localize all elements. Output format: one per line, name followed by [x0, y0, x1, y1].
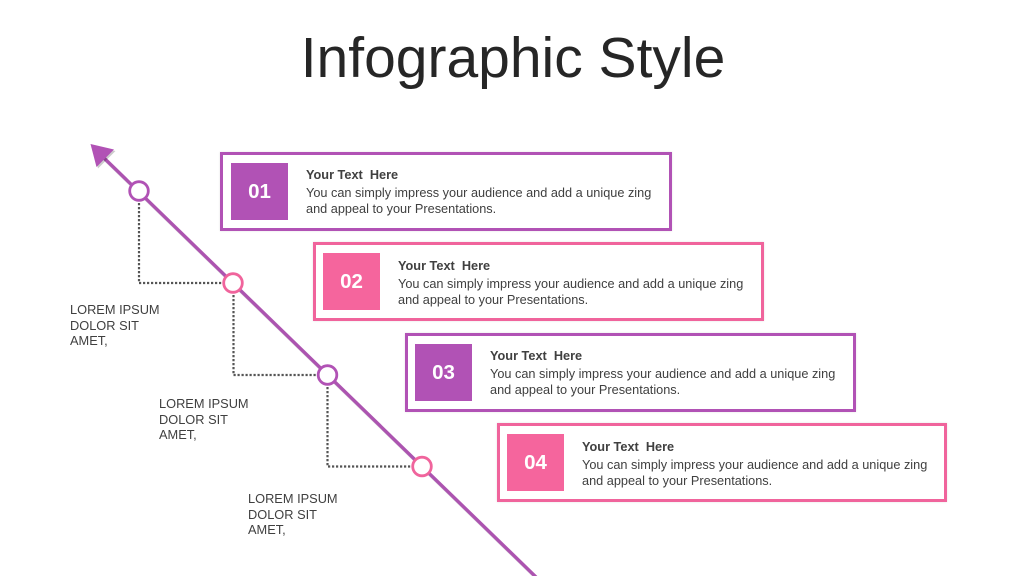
label 3: [248, 491, 338, 537]
text block 01: [306, 167, 651, 216]
dotted connector 3: [328, 387, 411, 466]
label 3: AMET,: [248, 522, 286, 537]
text block 01: You can simply impress your audience and add a unique zing: [306, 185, 651, 200]
text block 02: Your Text Here: [398, 258, 490, 273]
number 02: [323, 253, 380, 310]
label 2: [159, 396, 249, 442]
text block 01: Your Text Here: [306, 167, 398, 182]
text block 03: [490, 348, 835, 396]
node 2: [224, 274, 242, 292]
label 1: LOREM IPSUM: [70, 302, 160, 317]
title: Infographic Style: [301, 26, 725, 90]
text block 02: and appeal to your Presentations.: [398, 292, 588, 306]
label 2: LOREM IPSUM: [159, 396, 249, 411]
panel: step 03: [405, 333, 856, 412]
dotted connector 2: [234, 295, 316, 375]
panel: step 01: [220, 152, 672, 231]
label 1: [70, 302, 160, 348]
number 02: 02: [340, 270, 363, 293]
label 2: AMET,: [159, 427, 197, 442]
text block 03: You can simply impress your audience and add a unique zing: [490, 366, 835, 381]
text block 04: Your Text Here: [582, 439, 674, 454]
number 04: 04: [524, 451, 547, 474]
text block 03: and appeal to your Presentations.: [490, 382, 680, 396]
number 01: [231, 163, 288, 220]
number 01: 01: [248, 180, 271, 203]
dotted connector 1: [139, 203, 222, 283]
text block 03: Your Text Here: [490, 348, 582, 363]
number 03: [415, 344, 472, 401]
label 1: AMET,: [70, 333, 108, 348]
label 3: DOLOR SIT: [248, 506, 317, 522]
text block 01: and appeal to your Presentations.: [306, 200, 496, 216]
node 4: [413, 457, 431, 476]
label 2: DOLOR SIT: [159, 412, 228, 426]
text block 04: You can simply impress your audience and add a unique zing: [582, 457, 927, 472]
label 1: DOLOR SIT: [70, 318, 139, 332]
text block 02: [398, 258, 743, 306]
text block 02: You can simply impress your audience and add a unique zing: [398, 276, 743, 291]
number 04: [507, 434, 564, 491]
number 03: 03: [432, 361, 455, 384]
node 1: [130, 182, 148, 200]
panel: step 02: [313, 242, 764, 321]
panel: step 04: [497, 423, 947, 502]
diagonal arrow line: [90, 144, 539, 576]
text block 04: [582, 439, 927, 488]
text block 04: and appeal to your Presentations.: [582, 472, 772, 488]
node 3: [318, 366, 337, 384]
label 3: LOREM IPSUM: [248, 491, 338, 506]
